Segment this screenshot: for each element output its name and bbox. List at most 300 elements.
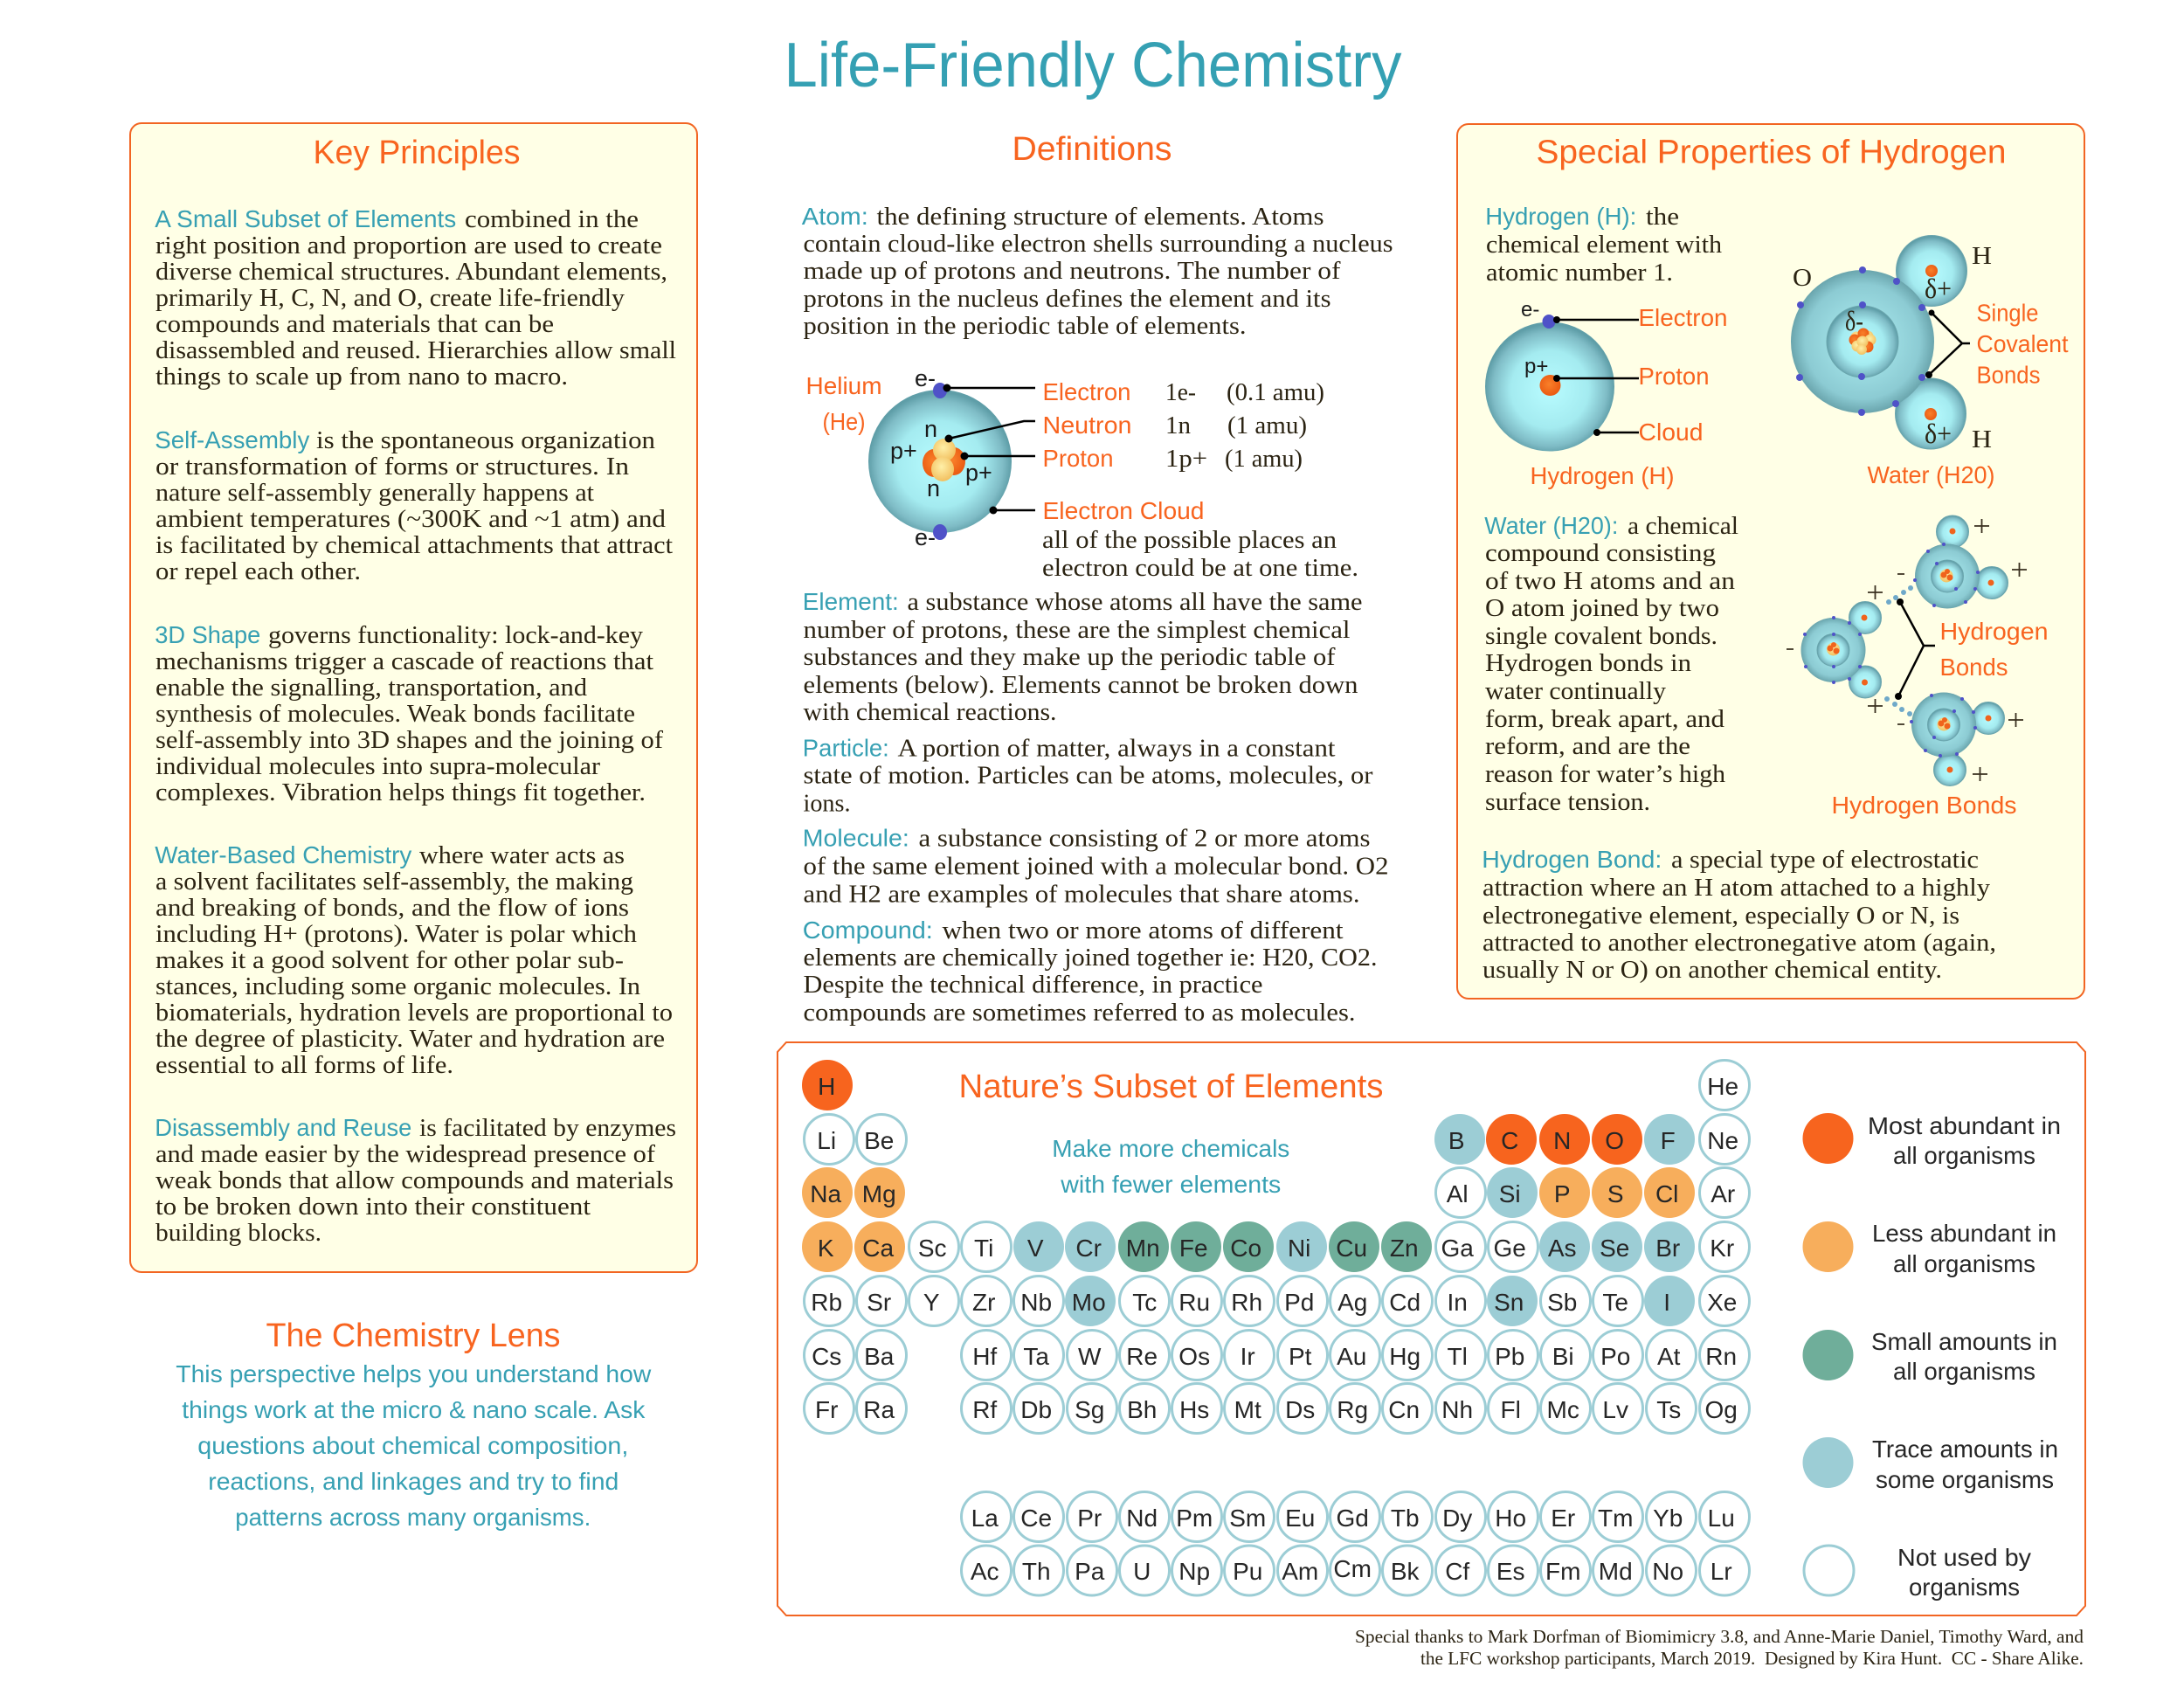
period 1: H xyxy=(818,1073,835,1100)
definition: molecule xyxy=(803,825,1389,909)
period 7: Mc xyxy=(1547,1396,1579,1423)
period 3: S xyxy=(1607,1180,1624,1207)
water atom labels: H xyxy=(1972,425,1992,453)
helium particle labels: e- xyxy=(915,524,936,550)
paragraph: water-based chemistry xyxy=(155,841,673,1079)
definition: element: elements (below). Elements cannot be broken down xyxy=(804,671,1358,699)
heading: nature's subset of elements: Nature’s Subset of Elements xyxy=(959,1069,1384,1105)
legend item: trace amounts: some organisms xyxy=(1876,1466,2054,1493)
lanthanides: Pr xyxy=(1077,1505,1102,1532)
text: hydrogen definition: atomic number 1. xyxy=(1486,259,1673,287)
definition: particle xyxy=(803,734,1373,818)
period 6: Po xyxy=(1600,1343,1630,1370)
single covalent bonds label: Bonds xyxy=(1976,362,2041,388)
single covalent bonds label: Single xyxy=(1976,299,2039,327)
period 2: F xyxy=(1661,1127,1676,1154)
hydrogen callout labels: Electron xyxy=(1639,304,1728,331)
text: hydrogen bond definition: attraction where an H atom attached to a highly xyxy=(1482,874,1991,902)
paragraph: a small subset of elements: combined in the xyxy=(465,205,639,233)
paragraph: water-based chemistry: and breaking of bonds, and the flow of ions xyxy=(156,894,629,922)
period 4: Fe xyxy=(1179,1235,1208,1262)
water atom labels xyxy=(1793,242,1992,453)
definition: atom: protons in the nucleus defines the element and its xyxy=(804,285,1331,313)
text: water definition: single covalent bonds. xyxy=(1485,622,1717,650)
subheading: make more chemicals: with fewer elements xyxy=(1060,1171,1281,1198)
period 5: Mo xyxy=(1072,1289,1106,1316)
helium particle labels xyxy=(890,365,992,550)
definition: element: number of protons, these are the simplest chemical xyxy=(804,616,1351,644)
hydrogen caption: Hydrogen (H) xyxy=(1531,462,1674,489)
period 2: B xyxy=(1448,1127,1465,1154)
paragraph: disassembly and reuse: weak bonds that allow compounds and materials xyxy=(156,1166,674,1194)
paragraph: 3D shape: synthesis of molecules. Weak bonds facilitate xyxy=(156,700,635,728)
period 4: Cu xyxy=(1336,1235,1367,1262)
legend item: most abundant: all organisms xyxy=(1893,1142,2035,1169)
legend item: small amounts: Small amounts in xyxy=(1871,1328,2057,1355)
helium legend: Electron Cloud xyxy=(1043,497,1204,524)
legend item: most abundant: Most abundant in xyxy=(1868,1112,2061,1139)
lanthanides: Eu xyxy=(1285,1505,1315,1532)
water oxygen atom xyxy=(1791,270,1934,413)
period 4: Ga xyxy=(1441,1235,1474,1262)
period 2: Ne xyxy=(1707,1127,1738,1154)
period 3: Na xyxy=(810,1180,842,1207)
diagram: hydrogen atom xyxy=(1485,298,1728,489)
period 5 xyxy=(804,1276,1749,1326)
paragraph: self-assembly: ambient temperatures (~300K and ~1 atm) and xyxy=(156,505,667,533)
lanthanides: Ho xyxy=(1495,1505,1526,1532)
helium cloud xyxy=(868,390,1012,533)
paragraph: 3D shape: enable the signalling, transportation, and xyxy=(156,674,588,702)
water oxygen nucleus xyxy=(1849,329,1876,355)
definition: atom: position in the periodic table of elements. xyxy=(804,312,1246,340)
text: water definition: reform, and are the xyxy=(1485,732,1690,760)
definition: atom: the defining structure of elements. Atoms xyxy=(877,203,1324,231)
water hydrogen atoms xyxy=(1896,236,1967,449)
helium name label: Helium xyxy=(805,372,882,399)
period 4: Ti xyxy=(974,1235,993,1262)
period 5: Pd xyxy=(1284,1289,1314,1316)
period 6: W xyxy=(1078,1343,1102,1370)
text: water definition: of two H atoms and an xyxy=(1485,567,1736,595)
lanthanides: Pm xyxy=(1176,1505,1213,1532)
water atom labels: δ+ xyxy=(1925,418,1952,449)
paragraph: disassembly and reuse: to be broken down into their constituent xyxy=(156,1193,591,1221)
covalent bond callout xyxy=(1925,309,1970,378)
period 7: Bh xyxy=(1127,1396,1157,1423)
period 4 xyxy=(802,1221,1749,1272)
lens description: reactions, and linkages and try to find xyxy=(208,1468,619,1495)
definition: atom: made up of protons and neutrons. The number of xyxy=(804,257,1341,285)
period 3: Cl xyxy=(1655,1180,1678,1207)
actinides: Am xyxy=(1282,1558,1318,1585)
water atom labels: δ- xyxy=(1845,305,1863,336)
credits xyxy=(1355,1626,2084,1669)
definition: compound: Despite the technical difference, in practice xyxy=(804,971,1263,999)
period 7: Hs xyxy=(1179,1396,1209,1423)
paragraph: self-assembly: or repel each other. xyxy=(156,557,361,585)
lens description xyxy=(176,1360,652,1531)
period 6: At xyxy=(1657,1343,1681,1370)
paragraph: disassembly and reuse: and made easier by the widespread presence of xyxy=(156,1140,655,1168)
helium legend: 1p+ xyxy=(1165,445,1207,473)
definition: compound: Compound: xyxy=(803,917,933,944)
definition: atom: contain cloud-like electron shells surrounding a nucleus xyxy=(804,230,1393,258)
legend xyxy=(1803,1112,2061,1601)
period 7: Rf xyxy=(972,1396,997,1423)
period 4: Se xyxy=(1600,1235,1629,1262)
helium legend xyxy=(1042,378,1358,582)
water atom labels: δ+ xyxy=(1925,273,1952,304)
paragraph: 3D shape: 3D Shape xyxy=(155,621,260,648)
period 6: Cs xyxy=(812,1343,841,1370)
paragraph: 3D shape xyxy=(155,621,663,806)
period 4: Ca xyxy=(862,1235,895,1262)
period 6: Au xyxy=(1337,1343,1366,1370)
single covalent bonds label xyxy=(1976,299,2069,388)
hydrogen particle labels xyxy=(1521,298,1548,378)
period 2 xyxy=(804,1114,1749,1165)
water atom labels: O xyxy=(1793,264,1812,292)
text: water definition xyxy=(1484,512,1738,816)
heading: definitions: Definitions xyxy=(1012,131,1172,168)
legend item: not used: organisms xyxy=(1909,1574,2020,1601)
text: water definition: form, break apart, and xyxy=(1485,705,1725,733)
hydrogen particle labels: p+ xyxy=(1524,355,1548,378)
period 7 xyxy=(804,1384,1749,1433)
period 5: Xe xyxy=(1707,1289,1737,1316)
text: hydrogen bond definition: usually N or O) on another chemical entity. xyxy=(1482,956,1942,984)
actinides: Ac xyxy=(971,1558,999,1585)
paragraph: a small subset of elements: things to scale up from nano to macro. xyxy=(156,363,568,391)
actinides: U xyxy=(1133,1558,1151,1585)
text block: the chemistry lens xyxy=(176,1318,652,1531)
helium name label: (He) xyxy=(823,408,865,435)
helium legend: all of the possible places an xyxy=(1042,526,1337,554)
paragraph: water-based chemistry: stances, including some organic molecules. In xyxy=(156,972,641,1000)
definition: particle: ions. xyxy=(804,790,851,818)
lanthanides: Gd xyxy=(1337,1505,1369,1532)
actinides: Np xyxy=(1178,1558,1210,1585)
period 2: N xyxy=(1553,1127,1571,1154)
period 6: Ba xyxy=(864,1343,895,1370)
paragraph: self-assembly: Self-Assembly xyxy=(155,426,309,453)
credits: the LFC workshop participants, March 2019. Designed by Kira Hunt. CC - Share Alike. xyxy=(1420,1648,2084,1669)
paragraph: a small subset of elements: right position and proportion are used to create xyxy=(156,232,662,259)
period 5: Cd xyxy=(1389,1289,1420,1316)
paragraph: self-assembly: is facilitated by chemical attachments that attract xyxy=(156,531,673,559)
paragraph: disassembly and reuse xyxy=(155,1114,676,1247)
period 7: Nh xyxy=(1441,1396,1473,1423)
period 4: As xyxy=(1548,1235,1577,1262)
definition: compound xyxy=(803,917,1377,1027)
legend item: less abundant xyxy=(1803,1220,2056,1277)
text: hydrogen bond definition: Hydrogen Bond: xyxy=(1482,846,1662,873)
definition: particle: state of motion. Particles can be atoms, molecules, or xyxy=(804,762,1373,790)
definition: molecule: Molecule: xyxy=(803,825,909,851)
single covalent bonds label: Covalent xyxy=(1976,330,2069,357)
text: hydrogen bond definition: attracted to another electronegative atom (again, xyxy=(1482,929,1996,957)
definition: element xyxy=(803,588,1363,726)
text: hydrogen bond definition: a special type of electrostatic xyxy=(1671,846,1979,874)
definition: compound: when two or more atoms of different xyxy=(942,917,1344,944)
legend item: less abundant: all organisms xyxy=(1893,1250,2035,1277)
period 6: Os xyxy=(1178,1343,1210,1370)
period 3: Al xyxy=(1447,1180,1469,1207)
lanthanides: Sm xyxy=(1229,1505,1266,1532)
charge signs xyxy=(1787,519,2027,781)
hydrogen bond dots xyxy=(1884,585,1913,716)
water molecule upper right xyxy=(1913,515,2008,608)
period 6: Ir xyxy=(1241,1343,1255,1370)
period 7: Cn xyxy=(1388,1396,1420,1423)
period 6: Hf xyxy=(972,1343,997,1370)
lanthanides xyxy=(961,1492,1749,1541)
period 7: Lv xyxy=(1602,1396,1628,1423)
period 5: Te xyxy=(1602,1289,1628,1316)
paragraph: a small subset of elements: disassembled and reused. Hierarchies allow small xyxy=(156,336,676,364)
paragraph: disassembly and reuse: Disassembly and Reuse xyxy=(155,1114,411,1141)
helium name label xyxy=(805,372,882,435)
period 5: In xyxy=(1448,1289,1468,1316)
definition: molecule: and H2 are examples of molecules that share atoms. xyxy=(804,881,1359,909)
actinides: Md xyxy=(1599,1558,1633,1585)
definition: element: substances and they make up the periodic table of xyxy=(804,643,1336,671)
lanthanides: Tm xyxy=(1598,1505,1633,1532)
paragraph: water-based chemistry: essential to all forms of life. xyxy=(156,1051,453,1079)
legend item: trace amounts xyxy=(1803,1435,2058,1493)
period 5: Sn xyxy=(1494,1289,1524,1316)
lens description: This perspective helps you understand how xyxy=(176,1360,652,1387)
water molecule lower right xyxy=(1910,692,2004,786)
lanthanides: Ce xyxy=(1020,1505,1052,1532)
subheading: make more chemicals xyxy=(1052,1135,1289,1198)
period 6: Pb xyxy=(1495,1343,1524,1370)
lanthanides: Nd xyxy=(1126,1505,1158,1532)
period 2: C xyxy=(1501,1127,1518,1154)
hydrogen bonds side label xyxy=(1939,618,2048,681)
heading: special properties of hydrogen: Special Properties of Hydrogen xyxy=(1536,135,2006,171)
lanthanides: Yb xyxy=(1653,1505,1683,1532)
period 4: Ge xyxy=(1494,1235,1526,1262)
legend item: not used xyxy=(1804,1544,2031,1601)
helium particle labels: e- xyxy=(915,365,936,391)
legend item: most abundant xyxy=(1803,1112,2061,1169)
paragraph: 3D shape: governs functionality: lock-and-key xyxy=(268,621,644,649)
period 7: Ra xyxy=(863,1396,895,1423)
helium electrons xyxy=(933,383,947,540)
legend item: not used: Not used by xyxy=(1897,1544,2031,1571)
text: hydrogen bond definition xyxy=(1482,846,1996,984)
period 3: P xyxy=(1554,1180,1571,1207)
definition: element: Element: xyxy=(803,588,899,615)
paragraph: water-based chemistry: the degree of plasticity. Water and hydration are xyxy=(156,1025,665,1053)
period 5: Zr xyxy=(972,1289,995,1316)
period 6 xyxy=(804,1330,1749,1380)
period 7: Og xyxy=(1705,1396,1738,1423)
helium particle labels: n xyxy=(927,475,940,502)
diagram: water molecule xyxy=(1791,236,2069,488)
hydrogen callout lines xyxy=(1553,316,1639,436)
period 7: Ts xyxy=(1656,1396,1681,1423)
heading: key principles: Key Principles xyxy=(313,135,521,171)
period 2: O xyxy=(1605,1127,1624,1154)
actinides: Bk xyxy=(1391,1558,1420,1585)
period 4: Br xyxy=(1655,1235,1680,1262)
text: water definition: reason for water’s high xyxy=(1485,760,1725,788)
credits: Special thanks to Mark Dorfman of Biomimicry 3.8, and Anne-Marie Daniel, Timothy Ward, and xyxy=(1355,1626,2084,1647)
period 7: Ds xyxy=(1285,1396,1315,1423)
paragraph: self-assembly xyxy=(155,426,673,585)
period 4: Sc xyxy=(918,1235,947,1262)
period 4: K xyxy=(818,1235,834,1262)
hydrogen callout labels: Proton xyxy=(1639,363,1709,390)
text: hydrogen definition xyxy=(1485,203,1722,287)
period 4: Kr xyxy=(1710,1235,1734,1262)
period 2: Be xyxy=(864,1127,894,1154)
period 7: Fl xyxy=(1501,1396,1521,1423)
period 5: Sr xyxy=(867,1289,891,1316)
legend item: trace amounts: Trace amounts in xyxy=(1872,1435,2058,1463)
hydrogen proton xyxy=(1539,375,1560,396)
period 6: Hg xyxy=(1389,1343,1420,1370)
period 6: Tl xyxy=(1448,1343,1468,1370)
period 5: Rh xyxy=(1231,1289,1262,1316)
definition: particle: Particle: xyxy=(803,734,889,762)
helium legend: Neutron xyxy=(1043,412,1132,439)
hydrogen bonds side label: Hydrogen xyxy=(1939,618,2048,645)
period 6: Rn xyxy=(1705,1343,1737,1370)
definition: element: a substance whose atoms all have the same xyxy=(907,588,1363,616)
period 4: Ni xyxy=(1288,1235,1310,1262)
hydrogen callout labels: Cloud xyxy=(1639,419,1704,446)
hydrogen bonds caption: Hydrogen Bonds xyxy=(1831,792,2016,819)
paragraph: self-assembly: or transformation of forms or structures. In xyxy=(156,453,630,481)
period 5: Tc xyxy=(1132,1289,1157,1316)
helium callout lines xyxy=(943,384,1035,514)
definition: molecule: a substance consisting of 2 or more atoms xyxy=(919,825,1370,853)
periodic table xyxy=(802,1060,1749,1595)
period 7: Rg xyxy=(1337,1396,1368,1423)
paragraph: a small subset of elements: primarily H, C, N, and O, create life-friendly xyxy=(156,284,625,312)
period 6: Ta xyxy=(1023,1343,1049,1370)
period 4: Zn xyxy=(1390,1235,1419,1262)
period 5: Ag xyxy=(1337,1289,1367,1316)
actinides: Cf xyxy=(1445,1558,1469,1585)
paragraph: a small subset of elements xyxy=(155,205,676,391)
actinides xyxy=(961,1546,1749,1595)
text: hydrogen definition: chemical element with xyxy=(1486,231,1722,259)
diagram: hydrogen bonds between water molecules xyxy=(1787,515,2048,819)
helium particle labels: p+ xyxy=(965,460,992,486)
text: hydrogen definition: the xyxy=(1646,203,1679,231)
helium legend: 1e- xyxy=(1165,378,1196,406)
paragraph: water-based chemistry: a solvent facilitates self-assembly, the making xyxy=(156,868,633,896)
hydrogen particle labels: e- xyxy=(1521,298,1539,322)
lanthanides: La xyxy=(971,1505,999,1532)
period 3: Ar xyxy=(1711,1180,1735,1207)
paragraph: a small subset of elements: compounds and materials that can be xyxy=(156,310,554,338)
text: water definition: compound consisting xyxy=(1485,539,1716,567)
period 4: V xyxy=(1027,1235,1044,1262)
helium legend: Proton xyxy=(1043,445,1113,472)
actinides: Th xyxy=(1022,1558,1051,1585)
heading: the chemistry lens: The Chemistry Lens xyxy=(266,1318,561,1354)
actinides: Pa xyxy=(1075,1558,1105,1585)
hydrogen bond callout xyxy=(1895,598,1935,700)
lens description: questions about chemical composition, xyxy=(197,1432,628,1459)
period 5: I xyxy=(1663,1289,1670,1316)
lens description: things work at the micro & nano scale. Ask xyxy=(182,1396,646,1423)
water atom labels: H xyxy=(1972,242,1992,270)
panel: definitions xyxy=(778,124,2085,1669)
hydrogen bonds side label: Bonds xyxy=(1939,654,2008,681)
panel: key principles xyxy=(130,123,697,1272)
text: water definition: O atom joined by two xyxy=(1485,594,1719,622)
lanthanides: Er xyxy=(1551,1505,1575,1532)
paragraph: water-based chemistry: makes it a good solvent for other polar sub- xyxy=(156,946,624,974)
helium particle labels: n xyxy=(924,416,937,442)
period 4: Cr xyxy=(1075,1235,1102,1262)
period 4: Mn xyxy=(1126,1235,1160,1262)
title: Life-Friendly Chemistry xyxy=(784,31,1401,100)
paragraph: self-assembly: nature self-assembly generally happens at xyxy=(156,479,594,507)
period 5: Ru xyxy=(1178,1289,1210,1316)
definition: particle: A portion of matter, always in a constant xyxy=(898,734,1335,762)
paragraph: a small subset of elements: diverse chemical structures. Abundant elements, xyxy=(156,258,667,286)
paragraph: 3D shape: mechanisms trigger a cascade of reactions that xyxy=(156,647,653,675)
water molecule left xyxy=(1801,601,1882,698)
definition: element: with chemical reactions. xyxy=(804,698,1057,726)
period 1: He xyxy=(1707,1073,1738,1100)
actinides: Cm xyxy=(1333,1555,1372,1582)
lanthanides: Lu xyxy=(1708,1505,1735,1532)
paragraph: 3D shape: complexes. Vibration helps things fit together. xyxy=(156,778,646,806)
hydrogen electron xyxy=(1543,315,1555,329)
text: hydrogen definition: Hydrogen (H): xyxy=(1485,203,1636,230)
period 5: Nb xyxy=(1020,1289,1052,1316)
helium legend: 1n xyxy=(1165,412,1192,439)
text: hydrogen bond definition: electronegative element, especially O or N, is xyxy=(1482,902,1959,930)
definition: atom: Atom: xyxy=(802,203,868,230)
period 1 xyxy=(802,1060,1749,1110)
text: water definition: water continually xyxy=(1485,677,1667,705)
paragraph: water-based chemistry: including H+ (protons). Water is polar which xyxy=(156,920,638,948)
period 7: Mt xyxy=(1234,1396,1261,1423)
actinides: Pu xyxy=(1233,1558,1262,1585)
helium legend: (1 amu) xyxy=(1225,445,1303,473)
helium legend: electron could be at one time. xyxy=(1042,554,1358,582)
definition: compound: compounds are sometimes referred to as molecules. xyxy=(804,999,1356,1027)
paragraph: 3D shape: individual molecules into supra-molecular xyxy=(156,752,600,780)
paragraph: water-based chemistry: where water acts as xyxy=(419,841,625,869)
paragraph: disassembly and reuse: building blocks. xyxy=(156,1219,321,1247)
period 7: Sg xyxy=(1075,1396,1104,1423)
lanthanides: Tb xyxy=(1391,1505,1420,1532)
water caption: Water (H20) xyxy=(1868,461,1995,488)
definition: molecule: of the same element joined with a molecular bond. O2 xyxy=(804,853,1389,881)
period 6: Re xyxy=(1126,1343,1158,1370)
diagram: helium atom xyxy=(803,365,1389,1027)
period 5: Y xyxy=(923,1289,940,1316)
legend item: small amounts xyxy=(1803,1328,2057,1385)
text: water definition: surface tension. xyxy=(1485,788,1650,816)
text: water definition: Hydrogen bonds in xyxy=(1485,649,1692,677)
paragraph: disassembly and reuse: is facilitated by enzymes xyxy=(419,1114,676,1142)
hydrogen callout labels xyxy=(1639,304,1728,446)
definition: atom xyxy=(802,203,1393,340)
period 5: Sb xyxy=(1547,1289,1577,1316)
